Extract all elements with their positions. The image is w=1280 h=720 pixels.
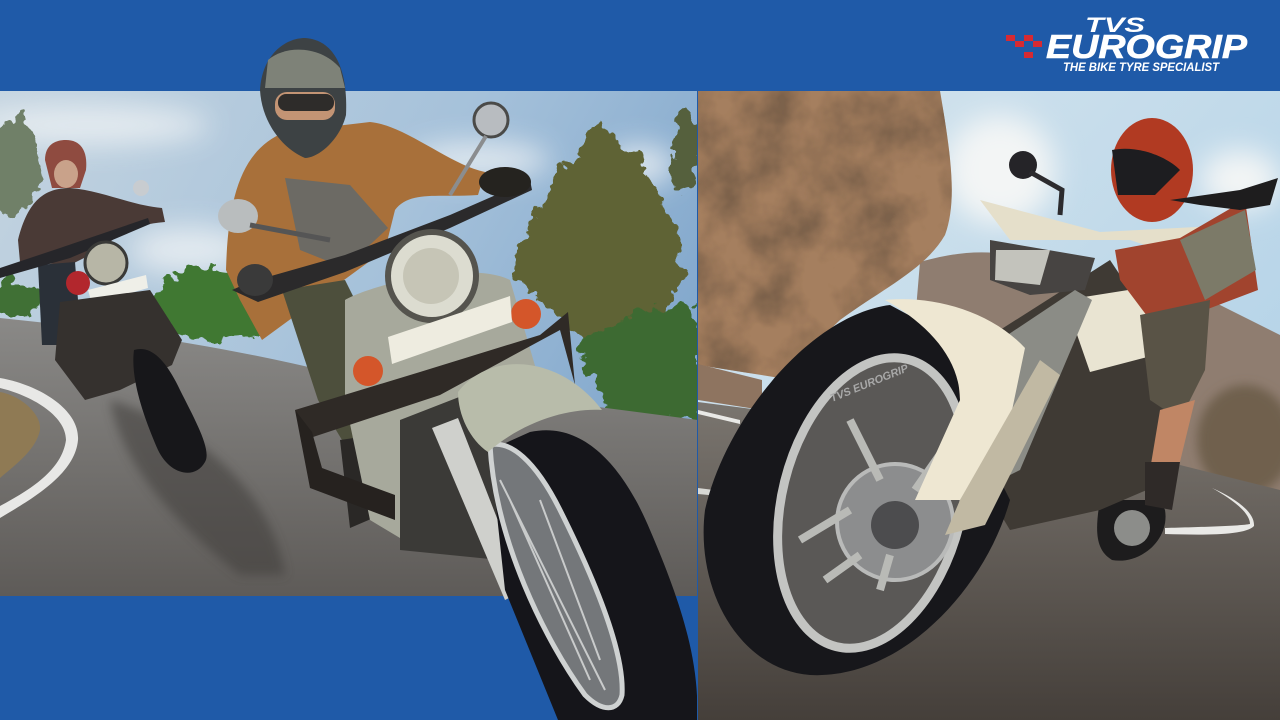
front tyre and wheel: TVS EUROGRIP	[829, 362, 911, 405]
front tyre	[490, 430, 697, 720]
large bike rider	[218, 38, 697, 720]
sport bike	[980, 118, 1278, 561]
panel: right photo, sport bike rider with rock	[698, 91, 1280, 720]
shadow	[110, 400, 285, 575]
wheel rim	[490, 444, 622, 708]
front tyre and wheel	[704, 299, 1060, 675]
road right	[698, 402, 1280, 720]
small bike rider	[0, 140, 207, 473]
icon: red checker flag	[1006, 35, 1042, 58]
wheel spokes	[500, 480, 605, 690]
clouds	[0, 105, 675, 274]
mudguard	[458, 364, 602, 452]
road	[0, 318, 698, 596]
panel: left photo, two riders on a road	[0, 38, 699, 720]
trees	[0, 105, 699, 420]
logo: TVS Eurogrip	[1006, 14, 1248, 74]
hill	[900, 252, 1280, 500]
rock	[698, 91, 952, 378]
logo text: EUROGRIP: EUROGRIP	[1046, 28, 1248, 65]
logo text: TVS: TVS	[1085, 14, 1145, 37]
logo tagline: THE BIKE TYRE SPECIALIST	[1063, 60, 1221, 74]
clouds right	[945, 115, 1280, 225]
